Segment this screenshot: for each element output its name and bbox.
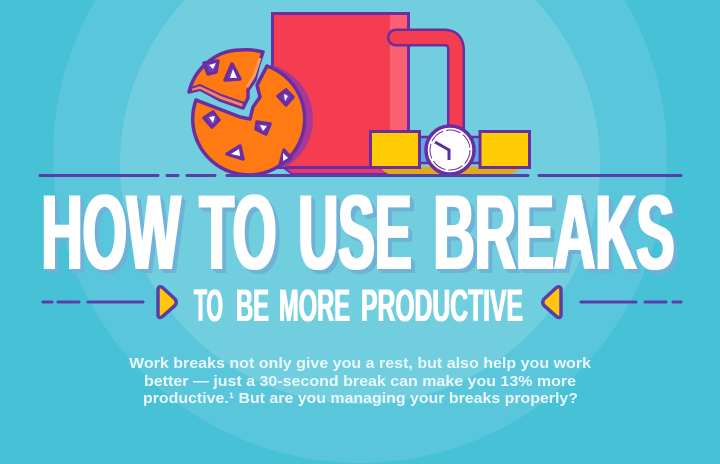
title: USE bbox=[298, 172, 412, 292]
icon: left arrow bbox=[158, 287, 176, 318]
subtitle: BE bbox=[236, 280, 269, 331]
icon: coffee mug bbox=[271, 12, 465, 174]
mug handle bbox=[396, 38, 456, 135]
top divider line bbox=[40, 174, 681, 177]
mug body bbox=[272, 14, 408, 168]
saucer bbox=[284, 168, 390, 174]
cookie lower piece bbox=[193, 66, 305, 175]
intro text: better — just a 30-second break can make you 13% more bbox=[144, 373, 576, 390]
title: TO bbox=[200, 172, 276, 292]
title bbox=[42, 172, 674, 292]
subtitle: PRODUCTIVE bbox=[361, 280, 523, 331]
icon: wristwatch bbox=[370, 126, 530, 174]
watch face bbox=[426, 126, 474, 174]
icon: right arrow bbox=[543, 287, 561, 318]
intro text bbox=[129, 355, 592, 407]
cookie crust band bbox=[191, 85, 244, 108]
cookie upper piece bbox=[189, 50, 263, 108]
cookie chips bbox=[204, 61, 293, 165]
subtitle divider right bbox=[581, 300, 681, 304]
subtitle: TO bbox=[194, 280, 223, 331]
intro text: productive.¹ But are you managing your breaks properly? bbox=[143, 390, 578, 407]
subtitle divider left bbox=[43, 300, 143, 304]
intro text: Work breaks not only give you a rest, but also help you work bbox=[129, 355, 592, 372]
watch strap right bbox=[480, 132, 530, 168]
subtitle: MORE bbox=[279, 280, 350, 331]
subtitle bbox=[194, 280, 523, 331]
watch base bbox=[378, 167, 522, 174]
icon: cookie bbox=[189, 50, 305, 175]
watch strap left bbox=[370, 132, 420, 168]
title: HOW bbox=[42, 172, 180, 292]
